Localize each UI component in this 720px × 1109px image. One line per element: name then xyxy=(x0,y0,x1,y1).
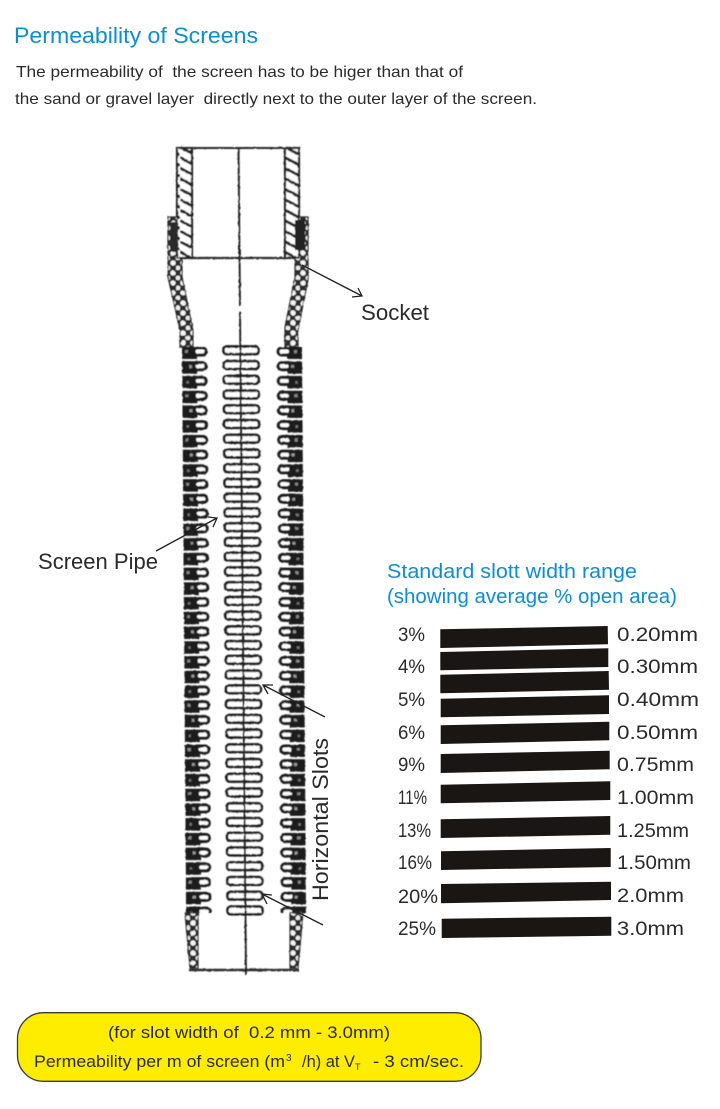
slot width labels: 1.25mm xyxy=(617,821,689,842)
slot width labels: 1.50mm xyxy=(617,853,691,874)
open area percentage labels: 11% xyxy=(398,788,427,809)
open area percentage labels: 4% xyxy=(398,657,425,678)
slot width labels xyxy=(617,625,699,940)
title: Permeability of Screens xyxy=(14,23,258,48)
bottom socket xyxy=(185,913,303,970)
open area percentage labels: 6% xyxy=(398,723,425,744)
arrow: screen pipe xyxy=(156,517,217,551)
slot width labels: 3.0mm xyxy=(617,919,684,940)
slot width labels: 0.75mm xyxy=(617,755,694,776)
slot width heading xyxy=(387,561,677,608)
slot width bars xyxy=(440,626,611,938)
yellow callout xyxy=(18,1013,481,1081)
arrow: socket xyxy=(302,265,362,297)
slot width labels: 0.50mm xyxy=(617,723,698,744)
open area percentage labels xyxy=(398,625,438,940)
callout line two: Permeability per m of screen (m xyxy=(34,1052,285,1071)
slot width heading: (showing average % open area) xyxy=(387,586,677,608)
label: screen pipe: Screen Pipe xyxy=(38,549,158,574)
label: socket: Socket xyxy=(361,300,429,325)
slot width labels: 2.0mm xyxy=(617,886,684,907)
socket xyxy=(168,217,308,347)
arrow: lower horizontal slot xyxy=(262,894,323,925)
callout line two xyxy=(34,1052,464,1072)
callout line two: T xyxy=(355,1062,361,1072)
open area percentage labels: 25% xyxy=(398,919,436,940)
threaded walls and horizontal slots xyxy=(182,345,309,917)
centre axis xyxy=(238,148,246,975)
slot width labels: 0.30mm xyxy=(617,657,698,678)
callout line two: - 3 cm/sec. xyxy=(373,1052,464,1071)
intro text block: the sand or gravel layer directly next to the outer layer of the screen. xyxy=(15,91,537,108)
intro text block: The permeability of the screen has to be higer than that of xyxy=(16,64,464,81)
slot width labels: 1.00mm xyxy=(617,788,694,809)
callout line one: (for slot width of 0.2 mm - 3.0mm) xyxy=(108,1023,390,1042)
arrow: upper horizontal slot xyxy=(263,685,325,717)
callout line two: 3 xyxy=(286,1053,292,1064)
slot width labels: 0.20mm xyxy=(617,625,698,646)
callout line two: /h) at V xyxy=(302,1052,356,1071)
top collar xyxy=(177,148,299,258)
open area percentage labels: 5% xyxy=(398,690,425,711)
intro text block xyxy=(15,64,537,108)
open area percentage labels: 13% xyxy=(398,821,431,842)
label: horizontal slots: Horizontal Slots xyxy=(308,738,333,901)
slot width labels: 0.40mm xyxy=(617,690,699,711)
open area percentage labels: 9% xyxy=(398,755,425,776)
open area percentage labels: 20% xyxy=(398,887,438,908)
open area percentage labels: 3% xyxy=(398,625,425,646)
screen pipe technical drawing xyxy=(168,148,309,975)
open area percentage labels: 16% xyxy=(398,853,432,874)
slot width heading: Standard slott width range xyxy=(387,561,637,583)
